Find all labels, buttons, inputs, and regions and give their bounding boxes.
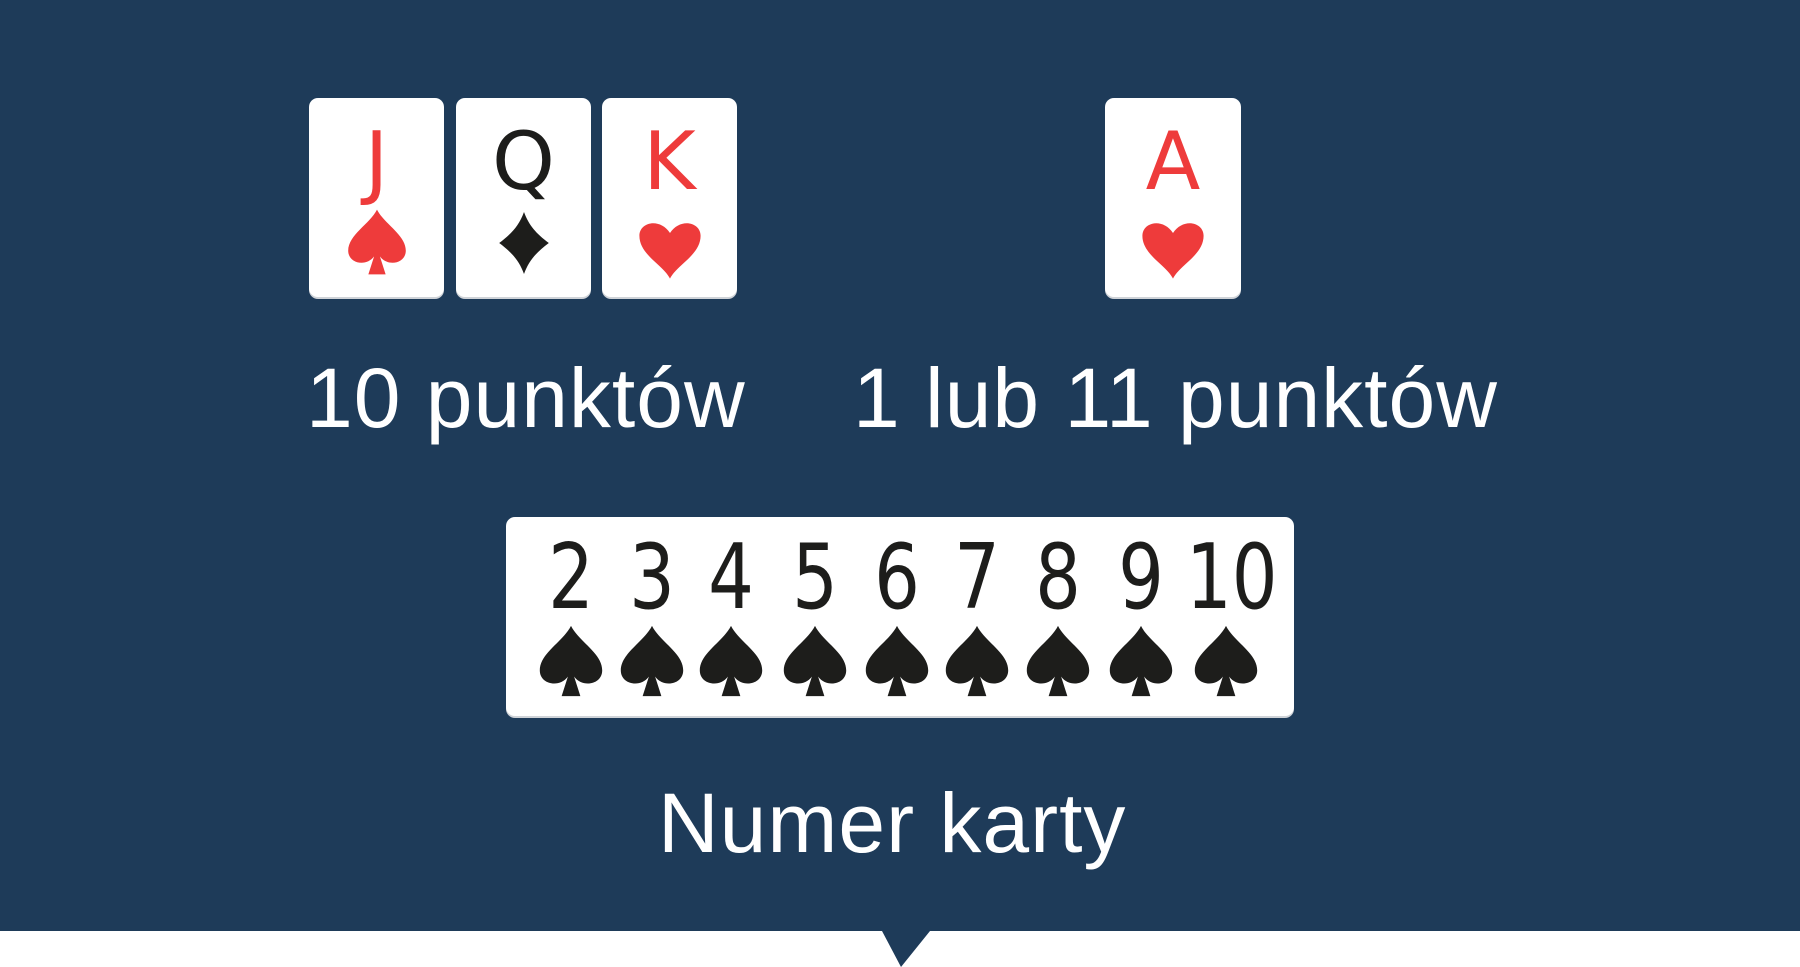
icon: spade red	[348, 210, 406, 274]
digits: 7	[954, 525, 1000, 630]
letter A: A	[1146, 115, 1200, 208]
card: Q	[456, 98, 591, 297]
letter K: K	[643, 115, 696, 208]
digits: 6	[874, 525, 920, 630]
letter J: J	[365, 115, 388, 208]
label: Numer karty: Numer karty	[658, 776, 1126, 870]
digits: 9	[1118, 525, 1164, 630]
spades row	[540, 626, 1258, 696]
card: J	[309, 98, 444, 297]
digits	[548, 525, 1278, 630]
label: 10 punktów: 10 punktów	[306, 351, 746, 445]
icon: diamond	[499, 212, 549, 274]
card: K	[602, 98, 737, 297]
digits: 10	[1186, 525, 1278, 630]
icon: heart	[639, 223, 701, 278]
card: A	[1105, 98, 1241, 297]
digits: 2	[548, 525, 594, 630]
digits: 5	[792, 525, 838, 630]
digits: 8	[1035, 525, 1081, 630]
card: number cards 2-10	[506, 517, 1294, 716]
icon: heart	[1142, 223, 1204, 278]
letter Q: Q	[492, 115, 555, 208]
digits: 4	[708, 525, 754, 630]
digits: 3	[629, 525, 675, 630]
label: 1 lub 11 punktów: 1 lub 11 punktów	[853, 351, 1498, 445]
